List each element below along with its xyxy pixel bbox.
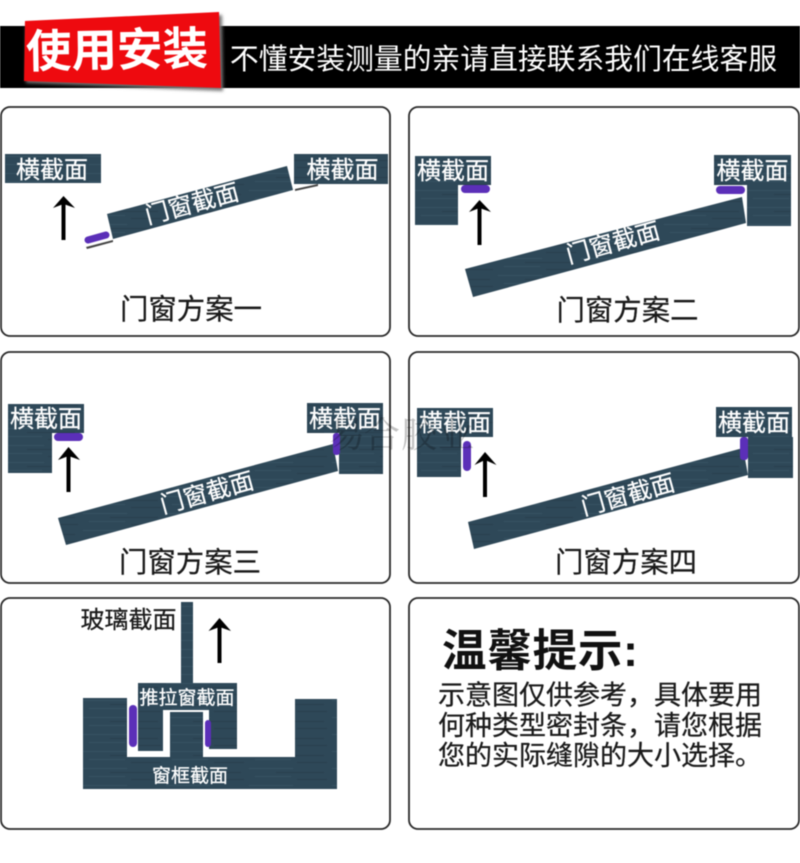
tips body: 示意图仅供参考，具体要用: [438, 680, 762, 710]
black header bar: [0, 26, 800, 88]
panel: door window plan three: [1, 352, 390, 583]
door window section: 门窗截面: [142, 179, 242, 230]
door window section: [58, 444, 338, 545]
frame section: [83, 698, 337, 789]
right frame section: 横截面: [718, 410, 790, 437]
caption: 门窗方案四: [555, 547, 697, 579]
right frame section: 横截面: [716, 158, 788, 185]
door window section: 门窗截面: [578, 470, 678, 521]
right seal strip: [205, 720, 211, 747]
caption: 门窗方案三: [119, 547, 261, 579]
tips body: 您的实际缝隙的大小选择。: [438, 741, 762, 771]
red title tag: [24, 12, 223, 91]
arrow: [474, 452, 496, 497]
seal strip: [88, 235, 106, 240]
right frame section: 横截面: [309, 406, 381, 433]
right seal strip: [740, 437, 748, 460]
header subtitle: 不懂安装测量的亲请直接联系我们在线客服: [230, 44, 777, 76]
header banner: [0, 12, 800, 91]
glass label: 玻璃截面: [80, 607, 176, 634]
left cross-section label: 横截面: [16, 157, 88, 184]
watermark: 业: [438, 415, 474, 455]
watermark: 合: [364, 415, 400, 455]
panel: door window plan two: [409, 107, 799, 336]
left frame section: 横截面: [10, 406, 82, 433]
left frame section: [415, 156, 491, 225]
caption: 门窗方案二: [557, 295, 698, 327]
tips body: 何种类型密封条，请您根据: [438, 711, 762, 741]
door window section: 门窗截面: [563, 218, 663, 269]
panel: door window plan four: [409, 352, 799, 583]
left cross-section label: [5, 154, 101, 184]
left seal strip: [463, 441, 471, 471]
left seal strip: [461, 185, 490, 193]
left frame section: 横截面: [419, 410, 491, 437]
watermark: 易: [329, 415, 365, 455]
caption: 门窗方案一: [120, 294, 262, 326]
watermark: [329, 415, 474, 455]
arrow: [469, 200, 491, 245]
watermark: 胶: [401, 415, 438, 455]
door window section: [468, 448, 748, 549]
frame section: 窗框截面: [152, 765, 228, 787]
door window section: 门窗截面: [157, 468, 257, 519]
right cross-section label: [294, 154, 388, 184]
arrow: [58, 447, 80, 492]
tips heading: 温馨提示:: [442, 627, 638, 676]
left seal strip: [54, 433, 83, 441]
tips body: [438, 680, 762, 771]
left frame section: [417, 408, 493, 477]
glass section: [181, 602, 193, 684]
left frame section: 横截面: [417, 158, 489, 185]
arrow: [208, 618, 231, 663]
door window section: [465, 197, 746, 297]
right seal strip: [333, 433, 340, 455]
door window section: [86, 166, 318, 249]
right frame section: [307, 403, 383, 474]
right cross-section label: 横截面: [306, 157, 378, 184]
right frame section: [716, 407, 793, 478]
right seal strip: [716, 186, 745, 194]
panel: sliding window: [1, 598, 390, 829]
left frame section: [8, 404, 84, 473]
panel: warm tips: [409, 598, 799, 829]
red title tag: 使用安装: [26, 23, 208, 78]
sash section: [138, 683, 237, 751]
sash section: 推拉窗截面: [139, 687, 235, 709]
left seal strip: [129, 705, 137, 747]
panel: door window plan one: [1, 107, 390, 336]
arrow: [53, 196, 75, 240]
right frame section: [714, 155, 791, 226]
